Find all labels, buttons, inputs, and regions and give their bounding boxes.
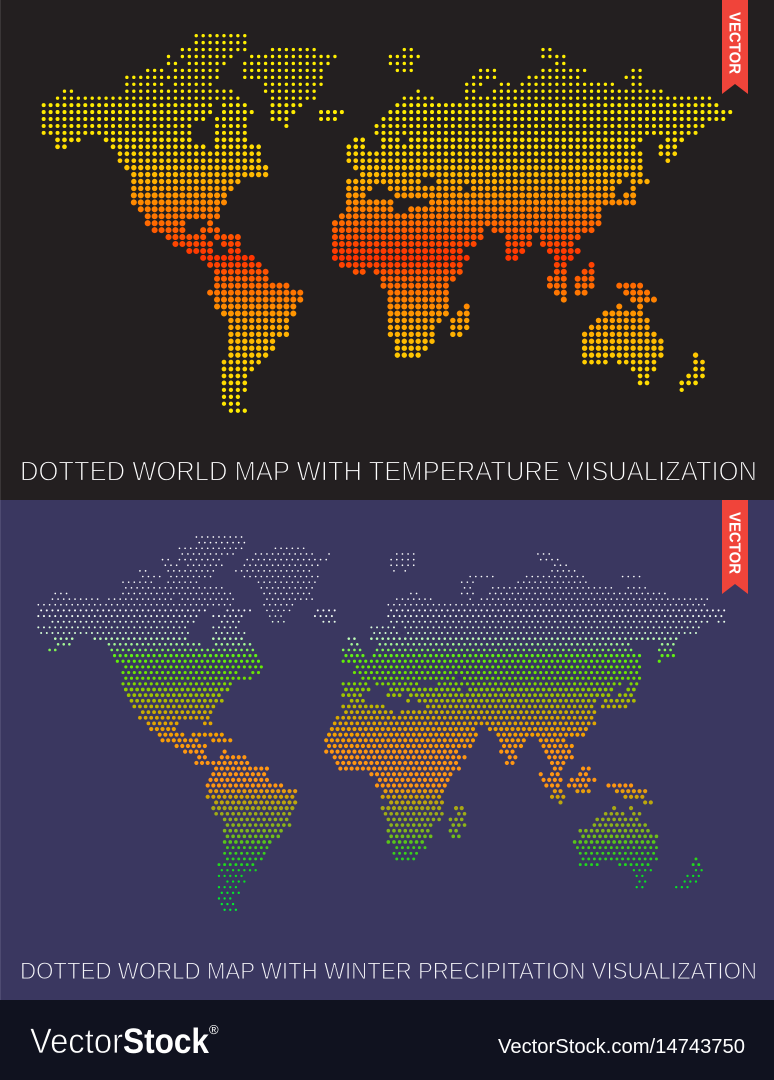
- panel background: dark: [0, 0, 774, 500]
- dotted world map: winter precipitation: [38, 537, 725, 910]
- panel background: indigo: [0, 500, 774, 1000]
- ribbon: vector badge: [722, 500, 748, 594]
- dots: South America: [203, 258, 301, 411]
- logo: VectorStock: VectorStock: [30, 1022, 218, 1061]
- text: stock image id: VectorStock.com/14743750: [498, 1035, 745, 1058]
- ribbon: vector badge: [722, 0, 748, 94]
- dots: North America: [38, 537, 262, 752]
- dots: New Zealand: [682, 355, 703, 390]
- dots: Australia and New Guinea: [585, 286, 662, 383]
- dots: Australia and New Guinea: [575, 786, 657, 887]
- panel: temperature map: [0, 0, 774, 500]
- dots: North America: [44, 36, 266, 251]
- ribbon: vector badge: VECTOR: [726, 512, 742, 574]
- dots: Eurasia and Africa: [335, 50, 731, 355]
- dots: New Zealand: [676, 859, 702, 887]
- footer: watermark bar: [0, 1000, 774, 1080]
- dotted world map: temperature: [44, 36, 731, 411]
- panel: precipitation map: [0, 500, 774, 1000]
- dots: Iceland: [321, 112, 343, 119]
- dots: Greenland: [245, 50, 336, 126]
- dots: Greenland: [236, 548, 330, 622]
- dots: Iceland: [315, 610, 335, 622]
- dots: South America: [196, 757, 296, 910]
- logo: VectorStock: ®: [209, 1022, 219, 1037]
- dots: Eurasia and Africa: [326, 554, 725, 859]
- ribbon: vector badge: VECTOR: [726, 12, 742, 74]
